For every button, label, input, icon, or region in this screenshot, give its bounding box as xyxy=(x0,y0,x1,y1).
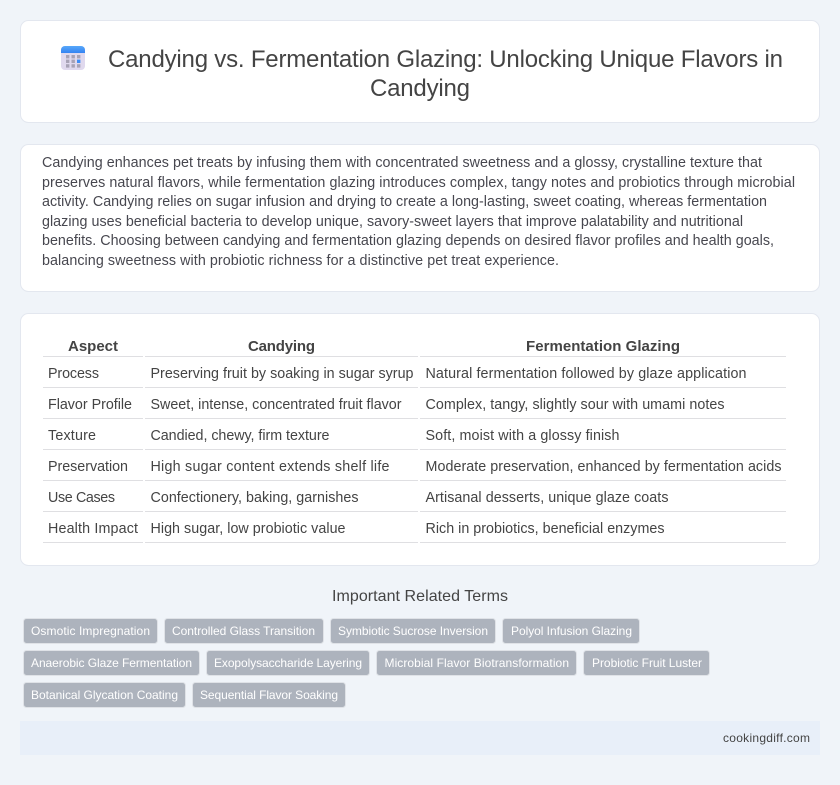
icon: calendar xyxy=(61,46,85,70)
row: Texture: Texture xyxy=(48,428,96,444)
row: Use Cases xyxy=(48,490,668,506)
title: Candying xyxy=(370,75,470,102)
table header row xyxy=(68,338,680,355)
chip: Controlled Glass Transition xyxy=(172,624,315,638)
row: Process: Natural fermentation followed by glaze application xyxy=(426,366,747,382)
text block: introduction paragraph xyxy=(42,155,795,269)
row: Process xyxy=(48,366,747,382)
row: Use Cases: Artisanal desserts, unique glaze coats xyxy=(426,490,668,506)
row: Preservation: Preservation xyxy=(48,459,128,475)
chip: Osmotic Impregnation xyxy=(31,624,150,638)
title: Candying vs. Fermentation Glazing: Unlocking Unique Flavors in xyxy=(108,46,783,73)
heading: related terms: Important Related Terms xyxy=(332,588,508,605)
row: Preservation xyxy=(48,459,782,475)
chip xyxy=(376,650,576,676)
text block: introduction paragraph: preserves natural flavors, while fermentation glazing introduces complex, tangy notes and probiotics through microbial xyxy=(42,175,795,191)
chip xyxy=(584,650,710,676)
row: Flavor Profile: Complex, tangy, slightly sour with umami notes xyxy=(426,397,724,413)
table header row: Candying xyxy=(248,338,315,355)
chip: Probiotic Fruit Luster xyxy=(592,656,702,670)
table header row: Fermentation Glazing xyxy=(526,338,680,355)
text block: introduction paragraph: balancing sweetness with probiotic richness for a distinctive pet treat experience. xyxy=(42,253,559,269)
chip xyxy=(164,618,324,644)
chip xyxy=(192,682,346,708)
row: Health Impact: High sugar, low probiotic value xyxy=(150,521,346,537)
chip xyxy=(24,618,158,644)
row: Health Impact xyxy=(48,521,664,537)
row: Health Impact: Health Impact xyxy=(48,521,138,537)
row: Process: Process xyxy=(48,366,99,382)
row: Use Cases: Use Cases xyxy=(48,490,115,506)
chip xyxy=(24,682,186,708)
chip: Exopolysaccharide Layering xyxy=(214,656,362,670)
footer text: cookingdiff.com xyxy=(723,731,810,745)
panel: header xyxy=(20,20,820,122)
chip xyxy=(330,618,496,644)
row: Flavor Profile: Flavor Profile xyxy=(48,397,132,413)
text block: introduction paragraph: benefits. Choosing between candying and fermentation glazing depends on desired flavor profiles and health goals, xyxy=(42,233,774,249)
text block: introduction paragraph: glazing uses beneficial bacteria to develop unique, savory-sweet layers that improve palatability and nutritional xyxy=(42,214,743,230)
chip: Anaerobic Glaze Fermentation xyxy=(31,656,192,670)
footer xyxy=(20,721,820,755)
chip: Microbial Flavor Biotransformation xyxy=(384,656,569,670)
chip: Symbiotic Sucrose Inversion xyxy=(338,624,488,638)
row: Preservation: Moderate preservation, enhanced by fermentation acids xyxy=(426,459,782,475)
row: Preservation: High sugar content extends shelf life xyxy=(150,459,390,475)
row: Process: Preserving fruit by soaking in sugar syrup xyxy=(150,366,414,382)
chip: Polyol Infusion Glazing xyxy=(511,624,632,638)
table header row: Aspect xyxy=(68,338,118,355)
row: Texture: Soft, moist with a glossy finish xyxy=(426,428,620,444)
chip xyxy=(502,618,640,644)
panel: comparison table xyxy=(20,314,820,566)
row: Health Impact: Rich in probiotics, beneficial enzymes xyxy=(426,521,664,537)
text block: introduction paragraph: Candying enhances pet treats by infusing them with concentrated sweetness and a glossy, crystalline texture that xyxy=(42,155,762,171)
chip xyxy=(24,650,200,676)
chip: Botanical Glycation Coating xyxy=(31,688,178,702)
row: Flavor Profile: Sweet, intense, concentrated fruit flavor xyxy=(150,397,402,413)
chip xyxy=(206,650,370,676)
row: Flavor Profile xyxy=(48,397,724,413)
panel: introduction xyxy=(20,144,820,292)
related term chips xyxy=(24,618,710,708)
text block: introduction paragraph: activity. Candying relies on sugar infusion and drying to create a long-lasting, sweet coating, whereas fermentation xyxy=(42,194,767,210)
row: Texture: Candied, chewy, firm texture xyxy=(150,428,330,444)
chip: Sequential Flavor Soaking xyxy=(200,688,338,702)
row: Use Cases: Confectionery, baking, garnishes xyxy=(150,490,358,506)
row: Texture xyxy=(48,428,620,444)
